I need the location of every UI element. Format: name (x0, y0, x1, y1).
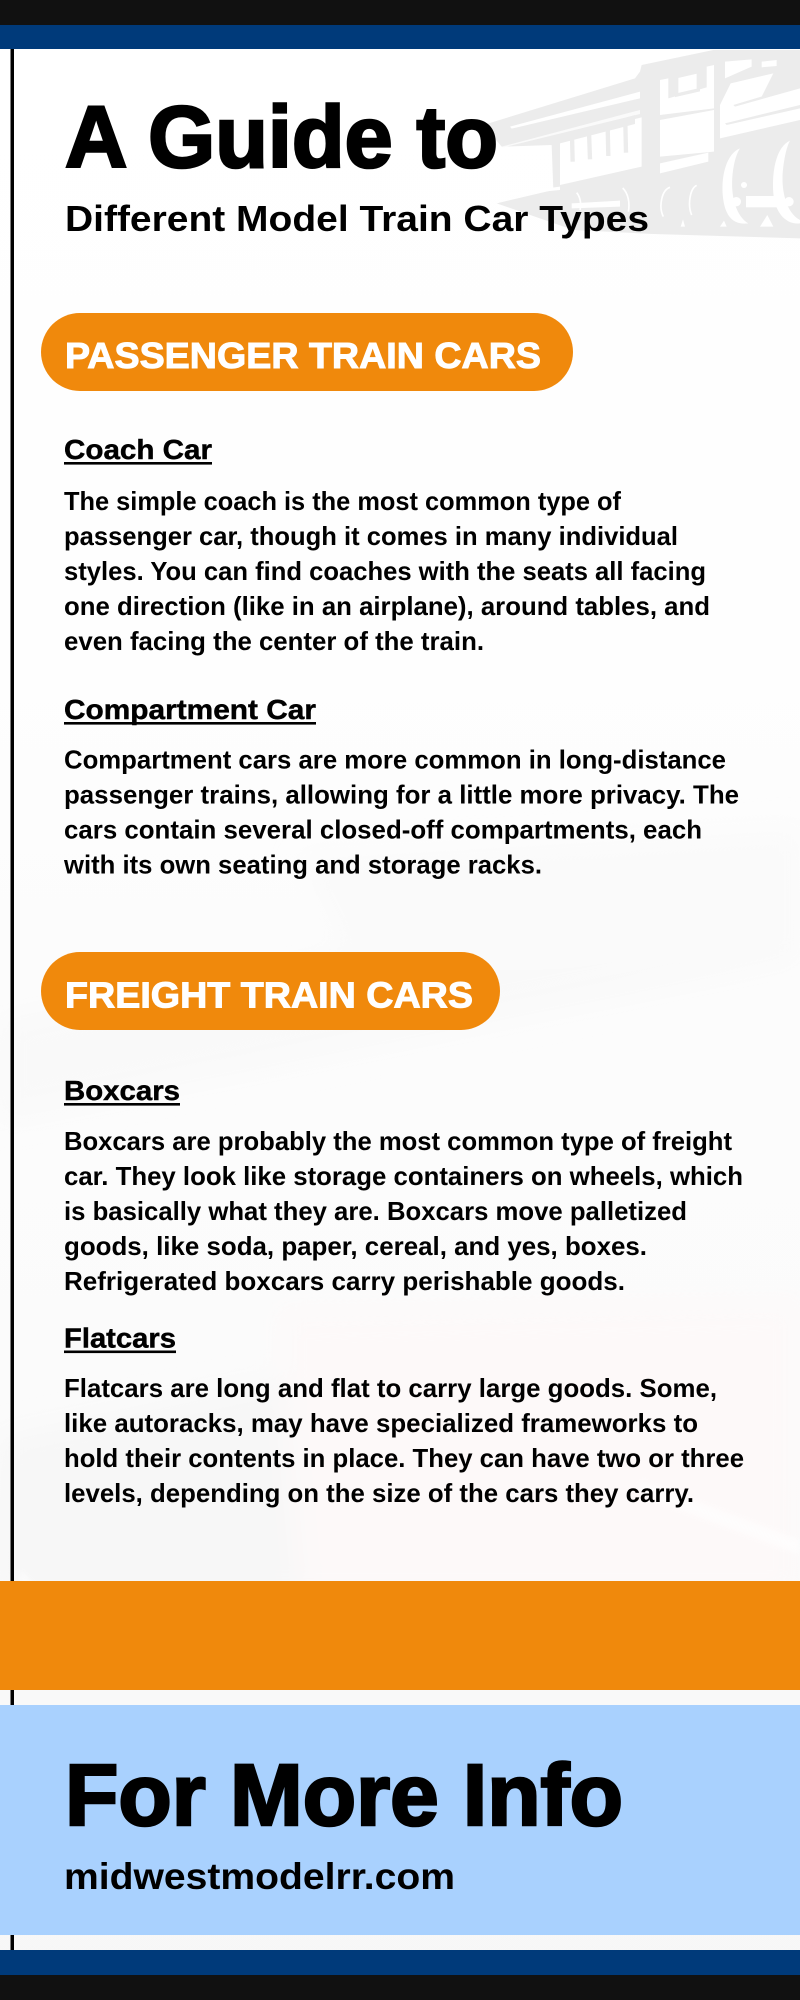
body text: coach car: passenger car, though it comes in many individual (64, 521, 678, 551)
call to action heading: For More Info (65, 1747, 623, 1844)
body text: compartment car: with its own seating and storage racks. (63, 850, 542, 880)
heading: coach car: Coach Car (64, 434, 212, 465)
body text: flatcars: Flatcars are long and flat to carry large goods. Some, (64, 1373, 717, 1403)
body text: coach car: styles. You can find coaches with the seats all facing (64, 556, 706, 586)
boxcars section (64, 1075, 743, 1296)
body text: boxcars: is basically what they are. Boxcars move palletized (64, 1196, 687, 1226)
title block (65, 89, 649, 239)
flatcars section (64, 1322, 744, 1508)
section header: freight train cars: FREIGHT TRAIN CARS (65, 974, 473, 1016)
heading: boxcars: Boxcars (64, 1075, 180, 1106)
train watermark illustration (483, 50, 800, 238)
body text: boxcars: Boxcars are probably the most common type of freight (64, 1126, 732, 1156)
website url: midwestmodelrr.com (64, 1856, 455, 1897)
body text: flatcars: levels, depending on the size of the cars they carry. (64, 1478, 694, 1508)
subtitle: Different Model Train Car Types (65, 198, 649, 239)
bottom navy band (0, 1950, 800, 1975)
body text: boxcars (64, 1126, 743, 1296)
top black band (0, 0, 800, 25)
body text: coach car: one direction (like in an airplane), around tables, and (64, 591, 710, 621)
heading: compartment car: Compartment Car (64, 694, 316, 725)
section header: freight train cars (41, 952, 500, 1030)
coach car section (64, 434, 710, 656)
body text: boxcars: car. They look like storage containers on wheels, which (64, 1161, 743, 1191)
body text: flatcars: hold their contents in place. They can have two or three (64, 1443, 744, 1473)
body text: compartment car: cars contain several closed-off compartments, each (64, 814, 702, 844)
title: A Guide to (65, 89, 498, 186)
body text: boxcars: Refrigerated boxcars carry perishable goods. (64, 1266, 625, 1296)
orange band (0, 1581, 800, 1690)
body text: coach car: even facing the center of the train. (64, 626, 484, 656)
body text: compartment car: passenger trains, allowing for a little more privacy. The (64, 780, 739, 810)
left vertical rule (10, 49, 14, 1950)
body text: coach car (64, 486, 710, 656)
body text: compartment car (63, 744, 739, 880)
body text: boxcars: goods, like soda, paper, cereal, and yes, boxes. (64, 1231, 647, 1261)
top navy band (0, 25, 800, 49)
body text: compartment car: Compartment cars are more common in long-distance (64, 744, 726, 774)
body text: flatcars: like autoracks, may have specialized frameworks to (64, 1408, 698, 1438)
section header: passenger train cars (41, 313, 573, 391)
call to action panel (0, 1705, 800, 1935)
body text: coach car: The simple coach is the most common type of (64, 486, 621, 516)
bottom black band (0, 1975, 800, 2000)
heading: flatcars: Flatcars (64, 1322, 176, 1354)
body text: flatcars (64, 1373, 744, 1508)
compartment car section (63, 694, 739, 880)
section header: passenger train cars: PASSENGER TRAIN CARS (65, 335, 541, 376)
